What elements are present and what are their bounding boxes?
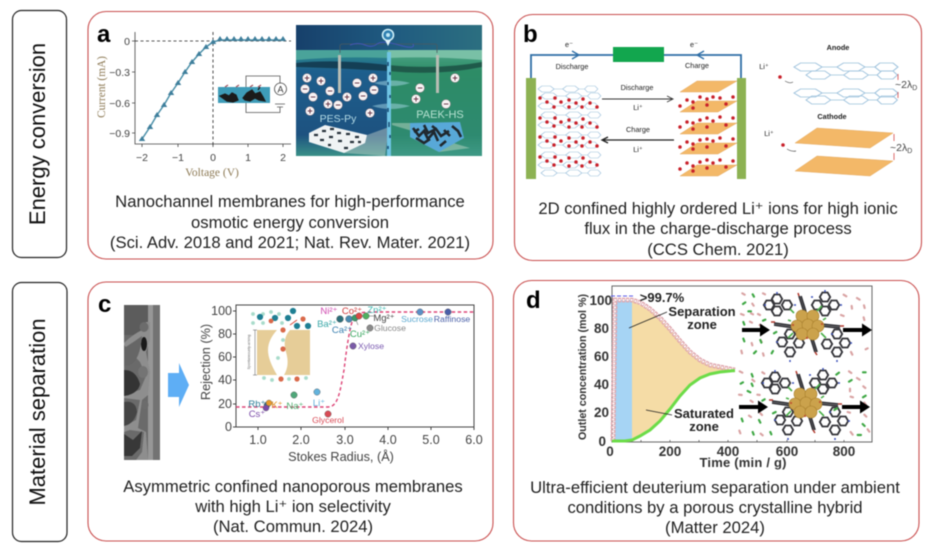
membrane block: PES-Py <box>309 125 367 153</box>
panel a: osmotic energy conversion <box>88 12 493 259</box>
orange zone <box>632 300 735 441</box>
caption c: (Nat. Commun. 2024) <box>213 517 373 536</box>
blue separation zone <box>615 300 632 441</box>
rejection chart: 40 <box>218 373 232 387</box>
illustration: salinity gradient cell: − <box>302 84 308 94</box>
rejection chart: Co²⁺ <box>342 306 362 317</box>
graphite anode stack <box>538 86 601 176</box>
current-voltage chart: −0.3 <box>109 67 130 79</box>
breakthrough chart: 40 <box>594 377 609 392</box>
anode and cathode detail: ~2λ <box>890 142 907 154</box>
side label: energy conversion <box>12 10 66 258</box>
breakthrough chart: 0 <box>598 434 606 449</box>
membrane block: PAEK-HS <box>410 122 464 152</box>
current-voltage chart: Voltage (V) <box>185 167 239 179</box>
breakthrough chart: 0 <box>606 444 614 459</box>
rejection chart: 20 <box>218 397 232 411</box>
rejection chart <box>199 304 483 464</box>
illustration: salinity gradient cell: + <box>318 76 324 86</box>
anode and cathode detail: Anode <box>827 43 849 52</box>
illustration: salinity gradient cell: + <box>367 108 373 118</box>
caption a: Nanochannel membranes for high-performance <box>115 192 465 211</box>
lower breakthrough curve <box>612 370 735 441</box>
rejection chart: Ba²⁺ <box>317 319 337 330</box>
illustration: salinity gradient cell: + <box>325 99 331 109</box>
rejection chart: 60 <box>218 350 232 364</box>
arrow <box>168 363 189 407</box>
panel b: Li-ion charge-discharge <box>514 14 922 260</box>
breakthrough chart <box>577 286 872 470</box>
rejection chart: Rejection (%) <box>199 324 213 400</box>
battery schematic <box>526 40 746 179</box>
rejection chart: 4.0 <box>379 433 397 447</box>
caption b: flux in the charge-discharge process <box>584 219 852 238</box>
caption a: osmotic energy conversion <box>191 213 389 232</box>
breakthrough chart: Separation <box>668 304 736 319</box>
battery schematic: e⁻ <box>565 40 573 49</box>
illustration: salinity gradient cell: + <box>452 73 458 83</box>
anode and cathode detail: Cathode <box>817 112 847 121</box>
illustration: salinity gradient cell <box>296 25 482 156</box>
breakthrough chart: zone <box>687 317 717 332</box>
breakthrough chart: Outlet concentration (mol %) <box>577 294 589 440</box>
illustration: salinity gradient cell: + <box>344 92 350 102</box>
scattered molecules <box>739 293 869 435</box>
rejection chart: Rb⁺ <box>248 399 266 410</box>
icon: light bulb <box>382 30 394 46</box>
inset: membrane circuit: A <box>277 84 284 94</box>
panel d: deuterium separation <box>514 280 919 541</box>
caption b: 2D confined highly ordered Li⁺ ions for high ionic <box>538 199 898 218</box>
illustration: salinity gradient cell: − <box>335 100 341 110</box>
panel letter d: d <box>526 287 541 314</box>
illustration: salinity gradient cell: − <box>310 92 316 102</box>
rejection chart: Ni²⁺ <box>320 306 338 317</box>
cathode sheets stack <box>680 81 737 176</box>
SEM micrograph <box>124 305 160 460</box>
panel letter c: c <box>98 291 111 318</box>
illustration: salinity gradient cell: PAEK-HS <box>416 109 464 121</box>
battery schematic: Charge <box>685 61 709 70</box>
crystal structure bottom <box>762 368 850 440</box>
illustration: salinity gradient cell: + <box>307 106 313 116</box>
current-voltage chart: 1 <box>245 152 251 164</box>
panel letter b: b <box>523 21 538 48</box>
current-voltage chart: 0 <box>124 36 130 48</box>
rejection chart: 5.0 <box>422 433 440 447</box>
anode and cathode detail: D <box>907 148 912 155</box>
breakthrough chart: zone <box>689 419 719 434</box>
inset: pore diagram: Spontaneously-arising <box>247 335 251 369</box>
rejection chart: Glycerol <box>312 415 344 425</box>
rejection chart: 6.0 <box>465 433 483 447</box>
illustration: salinity gradient cell: − <box>443 99 449 109</box>
illustration: salinity gradient cell: + <box>370 73 376 83</box>
crystal structure top <box>764 290 852 362</box>
breakthrough chart: 400 <box>717 444 739 459</box>
rejection chart: Ca²⁺ <box>332 325 352 336</box>
current-voltage chart: −1 <box>172 152 184 164</box>
anode and cathode detail: Li⁺ <box>764 129 774 138</box>
rejection chart: 2.0 <box>292 433 310 447</box>
breakthrough chart: 600 <box>776 444 798 459</box>
battery schematic: Charge <box>626 125 650 134</box>
illustration: salinity gradient cell: − <box>417 83 423 93</box>
illustration: salinity gradient cell: + <box>304 73 310 83</box>
caption d: Ultra-efficient deuterium separation under ambient <box>530 478 900 497</box>
rejection chart: Cs⁺ <box>249 409 265 420</box>
caption c <box>123 477 463 536</box>
rejection chart: Xylose <box>358 341 384 351</box>
caption b <box>538 199 898 259</box>
caption c: with high Li⁺ ion selectivity <box>194 497 391 516</box>
caption d: conditions by a porous crystalline hybrid <box>567 498 863 517</box>
upper breakthrough curve <box>613 300 735 441</box>
current-voltage chart: −2 <box>136 152 148 164</box>
current-voltage chart: 2 <box>280 152 286 164</box>
rejection chart: 100 <box>211 304 232 318</box>
current-voltage chart: −0.9 <box>109 128 130 140</box>
breakthrough chart: 800 <box>833 444 855 459</box>
rejection chart: Raffinose <box>434 314 470 324</box>
rejection chart: Glucose <box>374 323 406 333</box>
inset: pore diagram <box>247 308 311 382</box>
anode and cathode detail <box>759 43 917 176</box>
caption c: Asymmetric confined nanoporous membranes <box>123 477 463 496</box>
rejection chart: Cu²⁺ <box>350 329 370 340</box>
caption d: (Matter 2024) <box>665 518 765 537</box>
side label: energy conversion: Energy conversion <box>25 43 50 225</box>
battery schematic: Discharge <box>621 83 653 92</box>
rejection chart: Sucrose <box>401 314 433 324</box>
illustration: salinity gradient cell: − <box>371 85 377 95</box>
illustration: salinity gradient cell: − <box>327 86 333 96</box>
illustration: salinity gradient cell: − <box>360 91 366 101</box>
current-voltage chart: 0 <box>210 152 216 164</box>
caption a: (Sci. Adv. 2018 and 2021; Nat. Rev. Mater. 2021) <box>110 233 470 252</box>
rejection chart: Stokes Radius, (Å) <box>288 449 394 464</box>
anode and cathode detail: ~2λ <box>895 79 912 91</box>
breakthrough chart: 100 <box>589 293 612 308</box>
battery schematic: Li⁺ <box>633 145 643 154</box>
caption d <box>530 478 900 537</box>
panel c: Li selectivity <box>88 282 493 541</box>
rejection chart: Li⁺ <box>313 398 325 409</box>
rejection chart: Na⁺ <box>286 401 304 412</box>
battery schematic: e⁻ <box>690 40 698 49</box>
side label: material separation <box>12 282 67 542</box>
rejection chart: Zn²⁺ <box>367 305 387 316</box>
side label: material separation: Material separation <box>25 318 50 506</box>
current-voltage chart: −0.6 <box>109 98 130 110</box>
battery schematic: Li⁺ <box>633 103 643 112</box>
breakthrough chart: 60 <box>594 349 609 364</box>
flow arrows <box>739 324 872 414</box>
anode and cathode detail: D <box>912 85 917 92</box>
caption a <box>110 192 470 252</box>
illustration: salinity gradient cell: PES-Py <box>320 113 357 125</box>
breakthrough chart: >99.7% <box>640 290 685 305</box>
illustration: salinity gradient cell: − <box>354 78 360 88</box>
rejection chart: 3.0 <box>336 433 354 447</box>
rejection chart: 80 <box>218 327 232 341</box>
inset: membrane circuit <box>218 76 286 112</box>
breakthrough chart: Time (min / g) <box>700 455 786 470</box>
panel letter a: a <box>97 21 111 48</box>
rejection chart: Mg²⁺ <box>373 313 395 324</box>
caption b: (CCS Chem. 2021) <box>647 240 789 259</box>
current-voltage chart: Current (mA) <box>96 56 108 118</box>
illustration: salinity gradient cell: + <box>413 94 419 104</box>
breakthrough chart: 80 <box>594 321 609 336</box>
current-voltage chart <box>96 32 291 179</box>
anode and cathode detail: Li⁺ <box>759 62 769 71</box>
rejection chart: 1.0 <box>249 433 267 447</box>
breakthrough chart: 20 <box>594 405 609 420</box>
rejection chart: K⁺ <box>271 400 283 411</box>
breakthrough chart: Saturated <box>674 406 734 421</box>
rejection chart: 0 <box>225 420 232 434</box>
battery schematic: Discharge <box>556 62 588 71</box>
breakthrough chart: 200 <box>659 444 681 459</box>
